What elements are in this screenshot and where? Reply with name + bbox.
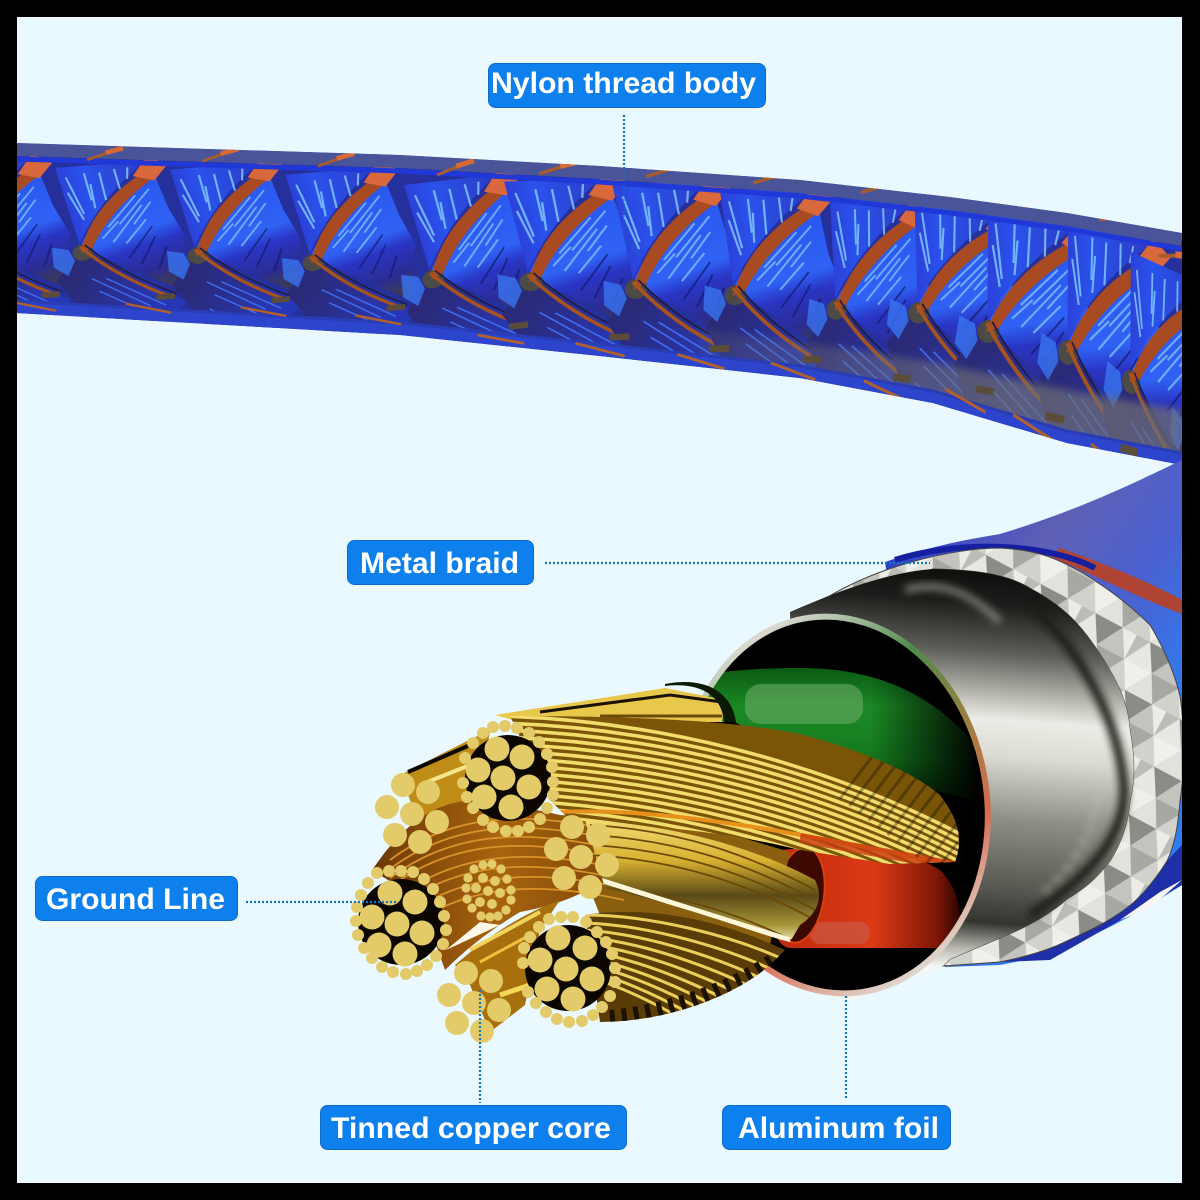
conductor face: upper large bundle xyxy=(457,720,559,837)
gold underlay between bundles xyxy=(560,815,790,955)
lower fine bundle xyxy=(585,912,785,1022)
label: Aluminum foil: Aluminum foil xyxy=(738,1112,939,1145)
cable end: outer jacket xyxy=(885,460,1182,967)
lower left strand xyxy=(455,900,560,1032)
conductor face: bottom seven strands xyxy=(437,961,511,1043)
conductor face: upper left seven strands xyxy=(375,773,449,854)
label: Ground Line: Ground Line xyxy=(46,883,225,916)
label: Ground Line xyxy=(36,876,238,920)
conductor face: small center bundle xyxy=(461,859,516,922)
green insulated wire xyxy=(708,668,973,798)
copper back bundle xyxy=(372,800,625,970)
leader lines xyxy=(246,115,930,1103)
conductor face: left large bundle xyxy=(350,865,452,980)
label: Nylon thread body: Nylon thread body xyxy=(491,67,756,100)
label: Metal braid xyxy=(348,540,534,584)
conductor face: right seven strands xyxy=(544,815,619,899)
cable end: aluminum foil cylinder xyxy=(790,569,1134,1000)
red insulated wire xyxy=(770,844,960,948)
label: Metal braid: Metal braid xyxy=(360,547,519,580)
label: Aluminum foil xyxy=(722,1106,950,1150)
tinned copper conductors: strands xyxy=(372,682,959,1030)
label: Tinned copper core xyxy=(320,1106,626,1150)
cable mouth with inner conductors xyxy=(702,614,991,996)
strand from green wire xyxy=(495,682,736,722)
middle rod bundle xyxy=(585,821,819,942)
braided nylon cable body xyxy=(17,143,1182,464)
upper large bundle xyxy=(510,716,959,864)
strand behind upper left face xyxy=(400,730,490,850)
label: Tinned copper core: Tinned copper core xyxy=(331,1112,611,1145)
conductor face: lower large bundle xyxy=(517,911,621,1028)
cable end: metal braid shield xyxy=(817,548,1184,966)
